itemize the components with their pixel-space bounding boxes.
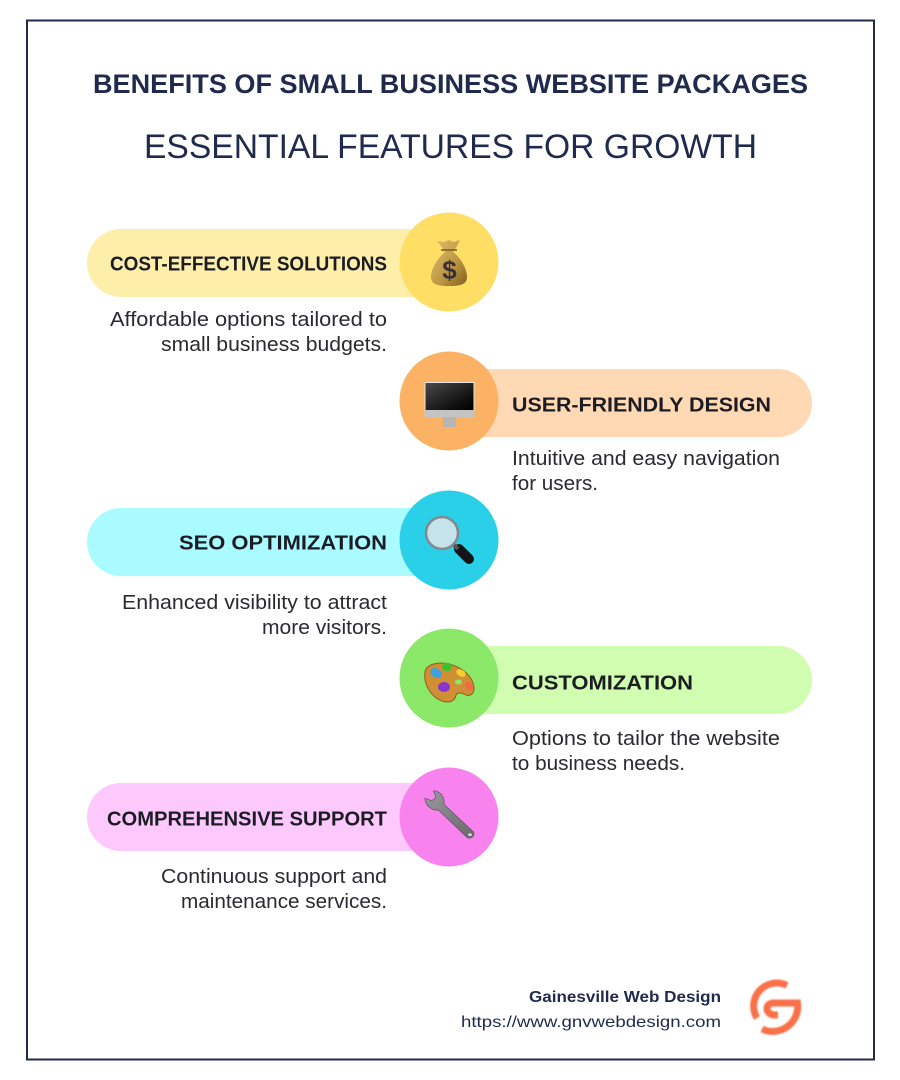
circle bbox=[400, 352, 498, 450]
subtitle: ESSENTIAL FEATURES FOR GROWTH bbox=[144, 128, 757, 166]
title: BENEFITS OF SMALL BUSINESS WEBSITE PACKAGES bbox=[93, 69, 808, 99]
description: Options to tailor the website bbox=[512, 728, 780, 750]
description: to business needs. bbox=[512, 753, 685, 775]
label: SEO OPTIMIZATION bbox=[179, 532, 387, 554]
footer: company name: Gainesville Web Design bbox=[529, 989, 721, 1006]
pill bbox=[87, 229, 440, 297]
footer: website url: https://www.gnvwebdesign.com bbox=[461, 1014, 721, 1031]
icon: artist palette bbox=[425, 663, 475, 702]
description: Affordable options tailored to bbox=[110, 309, 387, 331]
label: USER-FRIENDLY DESIGN bbox=[512, 394, 771, 416]
icon: money bag bbox=[431, 240, 467, 286]
description: for users. bbox=[512, 473, 598, 495]
description: more visitors. bbox=[262, 617, 387, 639]
description bbox=[161, 866, 387, 913]
icon: wrench bbox=[425, 791, 474, 838]
description: Continuous support and bbox=[161, 866, 387, 888]
pill bbox=[87, 508, 440, 576]
circle bbox=[400, 212, 498, 312]
circle bbox=[400, 628, 498, 728]
label: COMPREHENSIVE SUPPORT bbox=[107, 808, 387, 830]
icon: magnifying glass bbox=[426, 517, 469, 559]
panel: customization bbox=[400, 628, 812, 775]
pill bbox=[460, 369, 812, 437]
panel: seo optimization bbox=[87, 490, 498, 639]
circle bbox=[400, 768, 498, 866]
description bbox=[512, 448, 780, 495]
logo: G mark bbox=[754, 983, 798, 1031]
panel: user-friendly design bbox=[400, 352, 812, 495]
description: maintenance services. bbox=[181, 891, 387, 913]
label: COST-EFFECTIVE SOLUTIONS bbox=[110, 252, 387, 276]
icon: money bag: $ bbox=[442, 255, 457, 285]
pill bbox=[87, 783, 440, 851]
description: Intuitive and easy navigation bbox=[512, 448, 780, 470]
description: Enhanced visibility to attract bbox=[122, 592, 387, 614]
description: small business budgets. bbox=[161, 334, 387, 356]
panel: cost-effective solutions bbox=[87, 212, 498, 356]
description bbox=[122, 592, 387, 639]
description bbox=[512, 728, 780, 775]
icon: desktop monitor bbox=[424, 382, 474, 427]
label: CUSTOMIZATION bbox=[512, 672, 693, 694]
panel: comprehensive support bbox=[87, 768, 498, 913]
pill bbox=[460, 646, 812, 714]
description bbox=[110, 309, 387, 356]
circle bbox=[400, 490, 498, 590]
